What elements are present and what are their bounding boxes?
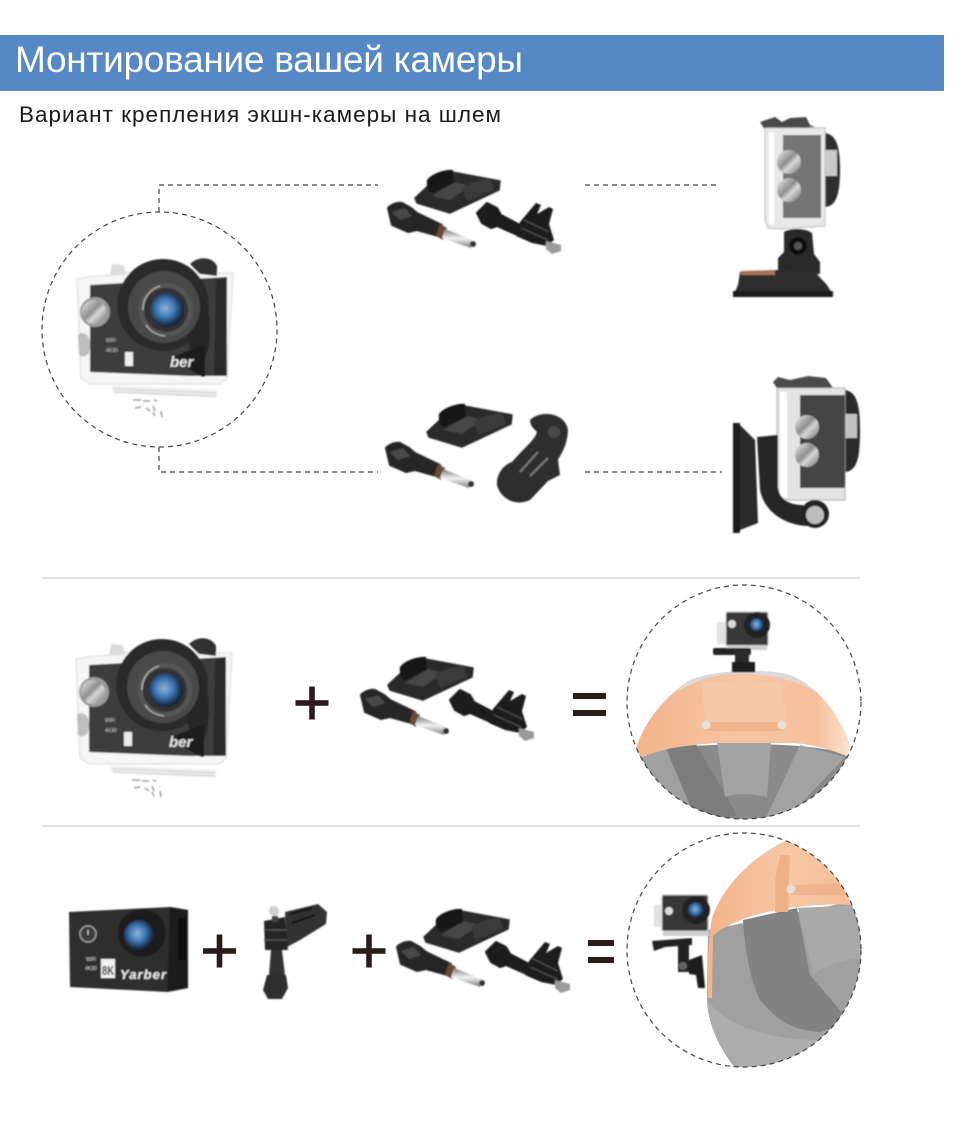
helmet top view with mounted camera (620, 585, 870, 830)
subtitle: Вариант крепления экшн-камеры на шлем (19, 102, 501, 127)
equals sign (588, 940, 614, 963)
dashed connector: camera to lower mount parts and side view (159, 447, 722, 472)
action camera with 8K logo: WiFi (86, 957, 96, 963)
equals sign (573, 693, 606, 716)
plus sign (203, 934, 236, 968)
action camera with 8K logo: Yarber (120, 967, 167, 982)
small camera on helmet side (652, 895, 710, 988)
dashed circle with camera in waterproof case: ber (170, 354, 195, 371)
J-hook buckle (497, 414, 568, 502)
side view: camera on flat mount (733, 117, 840, 297)
lower mount parts: curved mount, screw and J-hook (386, 404, 568, 502)
small camera on helmet top (713, 612, 770, 672)
divider line (42, 578, 860, 579)
dashed connector: camera to top mount parts and side view (159, 185, 718, 212)
action camera with 8K logo (69, 907, 188, 992)
divider line (42, 826, 860, 827)
top mount parts: curved mount and two screws (388, 170, 561, 254)
plus sign (296, 686, 328, 720)
action camera with 8K logo: 8K (102, 963, 114, 978)
dashed circle with camera in waterproof case (42, 212, 277, 447)
dashed circle with camera in waterproof case: WiFi (106, 338, 116, 344)
row 2: mount parts (397, 909, 570, 993)
row 1: mount parts (361, 657, 534, 741)
row 1: camera in case: WiFi (105, 718, 115, 724)
row 1: camera in case: 4K30 (105, 728, 117, 734)
row 1: camera in case: ber (169, 734, 194, 751)
title banner (0, 35, 944, 91)
action camera with 8K logo: 4K30 (85, 966, 97, 972)
plus sign (352, 934, 386, 968)
dashed circle with camera in waterproof case: 4K30 (106, 348, 118, 354)
helmet side view with mounted camera (627, 833, 870, 1070)
title banner: Монтирование вашей камеры (15, 39, 523, 80)
row 1: camera in case (76, 638, 232, 797)
side view: camera on J-hook and vertical mount (733, 376, 860, 533)
GoPro extension adapter (263, 904, 327, 999)
